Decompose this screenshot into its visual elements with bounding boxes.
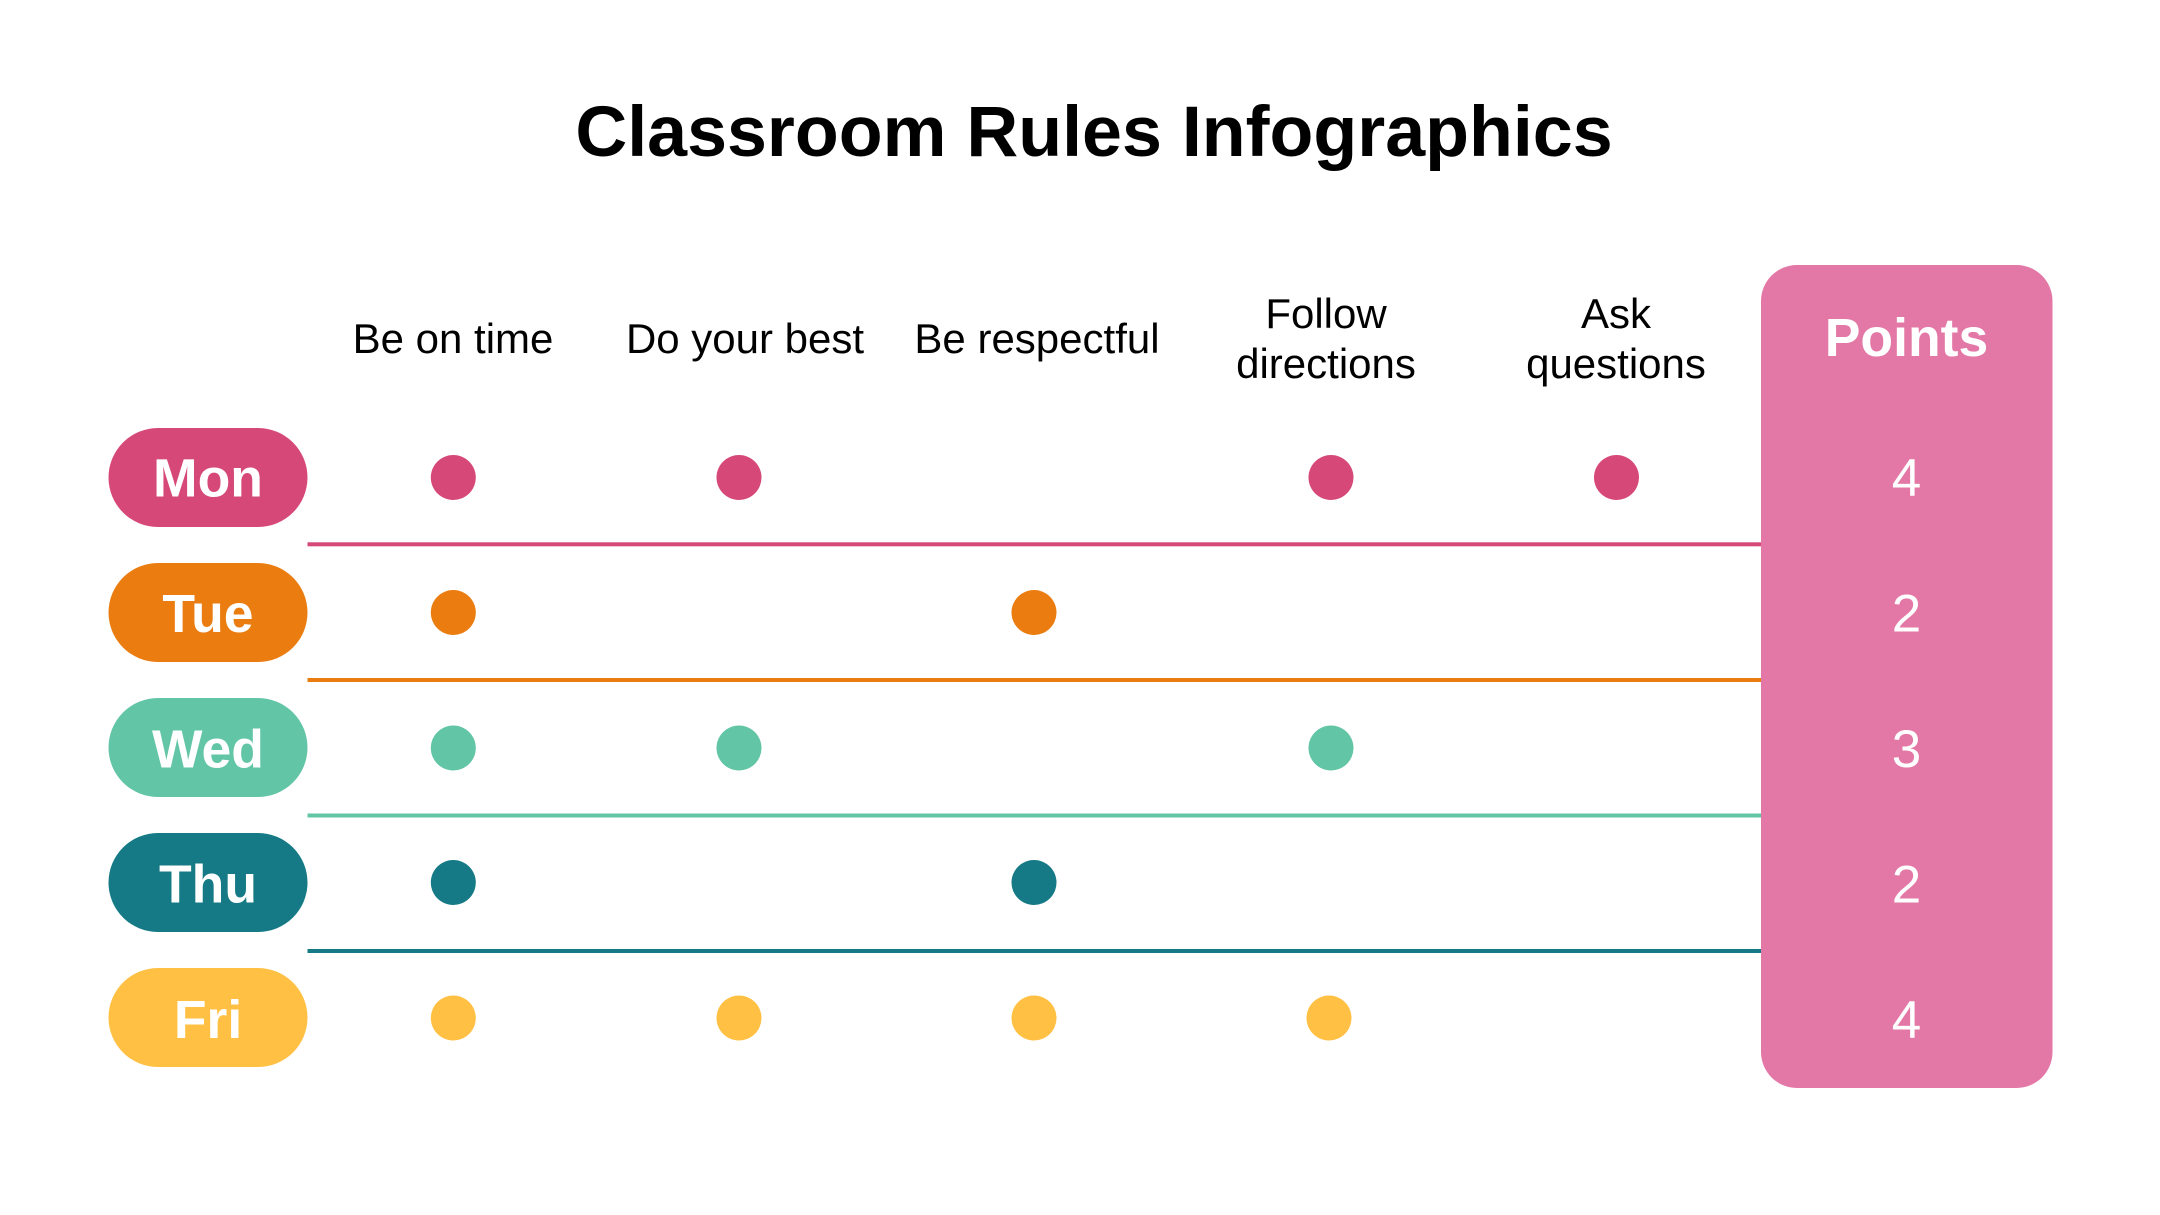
column headings: Ask (1581, 290, 1652, 337)
points values: 3 (1892, 720, 1921, 779)
column headings: questions (1526, 340, 1706, 387)
column headings: Do your best (626, 315, 864, 362)
panel: points column (1761, 265, 2052, 1088)
column headings: Be respectful (914, 315, 1160, 362)
column headings: Be on time (353, 315, 553, 362)
row: Tuesday (108, 563, 1761, 682)
points values (1892, 449, 1921, 1050)
row: Friday: Fri (174, 991, 242, 1050)
row: Monday (108, 428, 1761, 546)
points values: 2 (1892, 856, 1921, 914)
column headings: Follow (1265, 290, 1387, 337)
row: Thursday (108, 833, 1761, 953)
points values: 4 (1892, 449, 1921, 508)
column headings (353, 290, 1706, 387)
row: Tuesday: Tue (162, 585, 254, 644)
title: Classroom Rules Infographics (575, 92, 1613, 172)
points values: 2 (1892, 584, 1921, 644)
heading: points: Points (1825, 309, 1988, 368)
column headings: directions (1236, 340, 1416, 387)
row: Wednesday (108, 698, 1761, 818)
row: Monday: Mon (153, 450, 263, 508)
row: Wednesday: Wed (152, 720, 264, 780)
row: Friday (108, 968, 1352, 1067)
row: Thursday: Thu (159, 856, 257, 914)
points values: 4 (1892, 991, 1921, 1050)
